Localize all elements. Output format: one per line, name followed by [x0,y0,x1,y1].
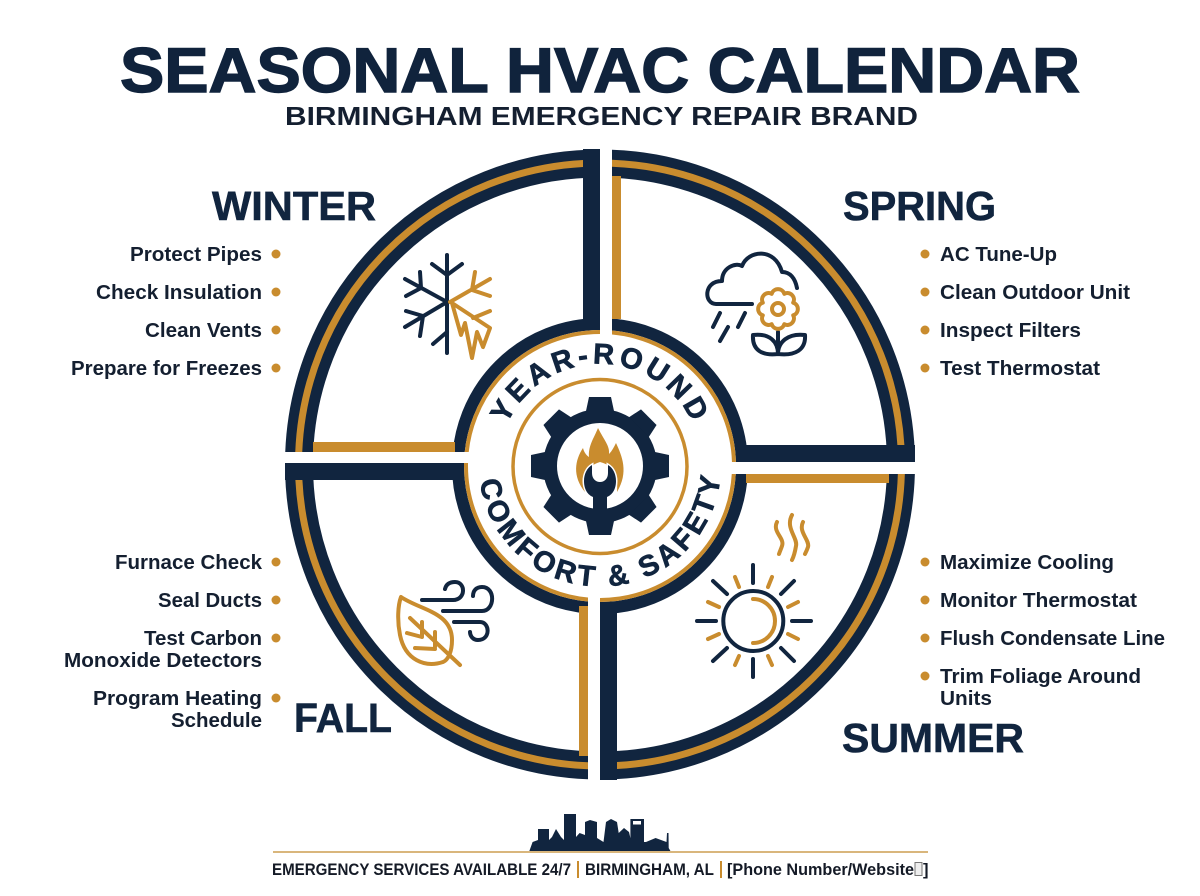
panel: summer [697,515,1165,761]
list: spring tasks: Test Thermostat [940,358,1100,380]
list: summer tasks: Maximize Cooling [940,552,1114,574]
list: winter tasks: Prepare for Freezes [71,358,262,380]
icon: gear with flame and wrench [531,397,669,535]
list: summer tasks: Flush Condensate Line [940,628,1165,650]
contact line [272,861,928,879]
list: winter tasks: Check Insulation [96,282,262,304]
list: summer tasks: Units [940,688,992,710]
wheel quadrant: winter [285,149,600,452]
list: summer tasks [920,552,1165,710]
icon: sun with heat waves [697,515,811,677]
contact line: BIRMINGHAM, AL [585,861,714,879]
list: fall tasks [64,552,280,732]
list: fall tasks: Program Heating [93,688,262,710]
list: fall tasks: Monoxide Detectors [64,650,262,672]
wheel quadrant: summer [600,474,915,780]
panel: fall [64,552,492,741]
list: fall tasks: Seal Ducts [158,590,262,612]
wheel quadrant: fall [285,463,588,780]
list: spring tasks [920,244,1130,380]
title: SEASONAL HVAC CALENDAR [120,36,1080,106]
list: fall tasks: Schedule [171,710,262,732]
subtitle: BIRMINGHAM EMERGENCY REPAIR BRAND [285,101,918,131]
list: fall tasks: Furnace Check [115,552,263,574]
icon: snowflake with lightning [405,255,490,358]
icon: leaf and wind [398,582,492,665]
center badge: year-round comfort and safety: COMFORT & SAFETY [480,474,720,586]
list: spring tasks: Clean Outdoor Unit [940,282,1130,304]
panel: spring [707,183,1130,380]
list: winter tasks: Clean Vents [145,320,262,342]
panel: winter [71,183,490,380]
list: summer tasks: Monitor Thermostat [940,590,1137,612]
heading: spring: SPRING [843,183,996,229]
list: fall tasks: Test Carbon [144,628,262,650]
icon: rain cloud and flower [707,254,805,354]
heading: winter: WINTER [212,183,376,229]
center badge: year-round comfort and safety [480,343,720,586]
center badge: year-round comfort and safety: YEAR-ROUND [488,343,706,418]
list: spring tasks: AC Tune-Up [940,244,1057,266]
heading: fall: FALL [294,695,392,741]
list: winter tasks: Protect Pipes [130,244,262,266]
list: summer tasks: Trim Foliage Around [940,666,1141,688]
heading: summer: SUMMER [842,715,1024,761]
contact line: EMERGENCY SERVICES AVAILABLE 24/7 [272,861,571,879]
wheel quadrant: spring [612,150,915,462]
contact line: [Phone Number/Website [727,861,914,879]
footer [272,814,928,879]
list: winter tasks [71,244,280,380]
contact line: ] [923,861,928,879]
list: spring tasks: Inspect Filters [940,320,1081,342]
icon: city skyline [529,814,671,852]
